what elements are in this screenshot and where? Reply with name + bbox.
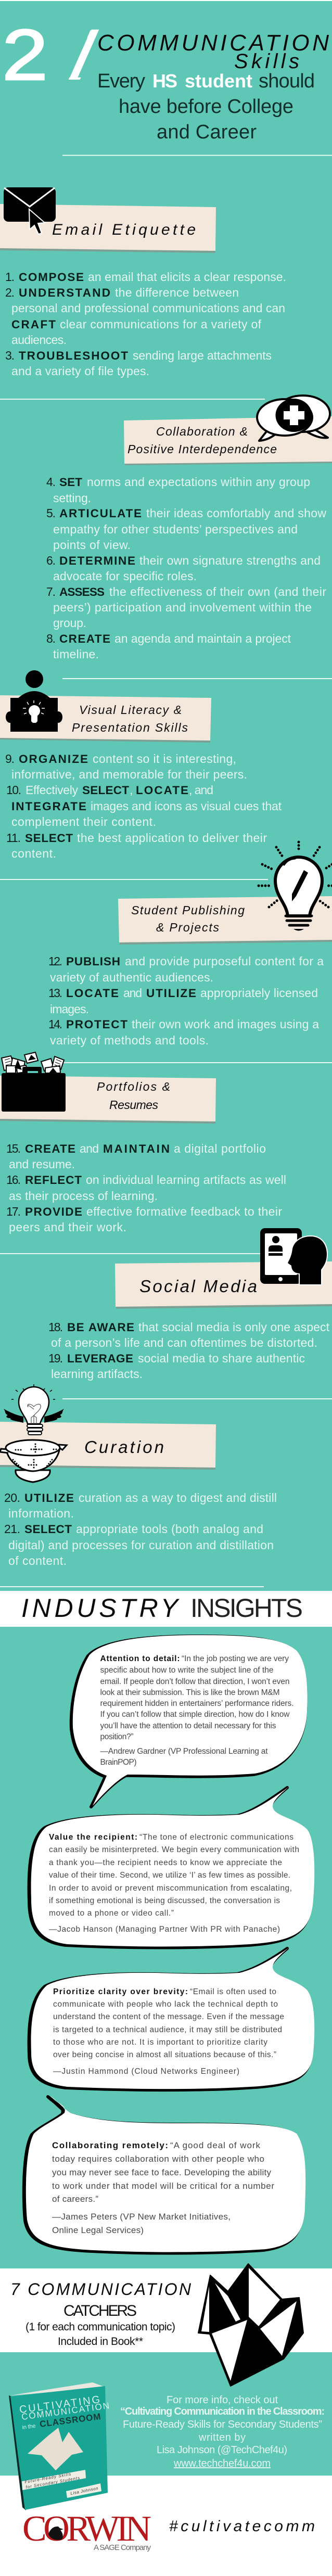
speech bubble: collaborating remotely: today requires collaboration with other people who — [52, 2154, 264, 2164]
title block: HS — [152, 70, 177, 92]
list: skills 4 to 8: 4. — [46, 475, 56, 489]
list: skills 15 to 17: MAINTAIN — [103, 1142, 170, 1155]
list: skills 9 to 11: , — [130, 783, 133, 797]
list: skills 1 to 3: CRAFT — [11, 318, 56, 331]
list: skills 9 to 11: Effectively — [25, 783, 78, 797]
list: skills 1 to 3: and a variety of file types. — [11, 364, 149, 378]
banner: social media — [115, 1261, 332, 1309]
speech bubble: value the recipient: moved to a phone or video call.” — [49, 1909, 174, 1918]
list: skills 4 to 8: points of view. — [53, 538, 131, 552]
list: skills 12 to 14: and provide purposeful content for a — [125, 954, 324, 968]
book cover: COMMUNICATION — [21, 2401, 110, 2422]
book cover: for Secondary Students — [25, 2476, 80, 2490]
heading band: industry insights — [0, 1591, 332, 1627]
banner: email etiquette — [0, 204, 216, 253]
banner: email etiquette: Email Etiquette — [52, 221, 196, 238]
panel: portfolios — [0, 1052, 286, 1234]
banner: portfolios — [0, 1076, 216, 1124]
icon: briefcase with documents — [2, 1052, 66, 1112]
list: skills 12 to 14: PUBLISH — [66, 955, 120, 968]
list: skills 1 to 3 — [5, 270, 286, 378]
banner: student publishing: & Projects — [156, 921, 220, 934]
banner: collaboration: Collaboration & — [156, 425, 248, 438]
panel: visual literacy — [0, 670, 282, 860]
list: skills 4 to 8: group. — [53, 616, 86, 630]
list: skills 9 to 11: 10. — [6, 783, 21, 797]
speech bubble: collaborating remotely: Collaborating remotely: — [52, 2140, 168, 2150]
speech bubble: attention to detail: requirement hidden in entertainers’ performance riders. — [100, 1699, 293, 1708]
list: skills 12 to 14: their own work and images using a — [132, 1017, 319, 1031]
speech bubble: attention to detail: look at their submission. This is like the brown M&M — [100, 1688, 280, 1697]
list: skills 15 to 17: peers and their work. — [9, 1220, 126, 1234]
list: skills 1 to 3: 2. — [5, 286, 15, 299]
list: skills 20 and 21: of content. — [8, 1554, 67, 1567]
icon: overlapping speech bubbles with plus — [257, 396, 330, 441]
panel: footer teal text — [120, 2394, 325, 2469]
list: skills 18 and 19: of a person’s life and can oftentimes be distorted. — [51, 1336, 317, 1349]
book cover: in the — [22, 2423, 36, 2431]
book cover: CLASSROOM — [39, 2412, 101, 2429]
list: skills 20 and 21: 21. — [4, 1522, 20, 1536]
list: skills 9 to 11: complement their content. — [11, 815, 156, 828]
list: skills 9 to 11: 11. — [6, 831, 21, 845]
list: skills 4 to 8: their own signature strengths and — [139, 554, 321, 567]
title block: Skills — [234, 50, 299, 73]
banner: student publishing — [118, 896, 332, 945]
list: skills 9 to 11: , and — [189, 783, 213, 797]
banner: collaboration: Positive Interdependence — [127, 442, 277, 456]
list: skills 20 and 21: curation as a way to digest and distill — [79, 1491, 277, 1504]
list: skills 4 to 8: 6. — [46, 554, 56, 567]
title block: 1 — [41, 14, 122, 100]
banner: visual literacy: Visual Literacy & — [79, 703, 182, 717]
icon: envelope with cursor — [4, 187, 56, 234]
list: skills 15 to 17: CREATE — [25, 1142, 75, 1155]
list: skills 20 and 21: SELECT — [24, 1523, 72, 1536]
panel: footer teal text: www.techchef4u.com — [173, 2458, 271, 2469]
list: skills 9 to 11: content. — [11, 847, 56, 860]
list: skills 15 to 17: PROVIDE — [25, 1205, 82, 1218]
list: skills 9 to 11: SELECT — [25, 832, 73, 845]
panel: collaboration — [46, 396, 332, 661]
list: skills 15 to 17: on individual learning artifacts as well — [86, 1173, 286, 1187]
title block: and Career — [157, 121, 257, 143]
title block: 2 — [2, 15, 48, 95]
title block — [5, 29, 329, 138]
list: skills 1 to 3: clear communications for a variety of — [60, 317, 262, 331]
speech bubble: attention to detail: email. If people don’t follow that direction, I won’t even — [100, 1677, 289, 1686]
list: skills 1 to 3: audiences. — [11, 333, 67, 347]
title block: student — [185, 70, 252, 92]
list: skills 4 to 8: ASSESS — [59, 585, 105, 598]
speech bubble: collaborating remotely: Online Legal Services) — [52, 2225, 144, 2235]
band: communication catchers: Included in Book** — [58, 2336, 143, 2348]
list: skills 9 to 11: 9. — [5, 752, 15, 766]
banner: collaboration — [124, 416, 332, 465]
speech bubble: collaborating remotely: to work under that model will be critical for a number — [52, 2181, 274, 2191]
banner: visual literacy: Presentation Skills — [72, 721, 188, 734]
list: skills 4 to 8: 8. — [46, 632, 56, 645]
banner: curation — [0, 1422, 216, 1470]
speech bubble: value the recipient: Value the recipient: — [49, 1833, 137, 1842]
panel: social media — [48, 1228, 332, 1381]
list: skills 1 to 3: sending large attachments — [133, 349, 272, 362]
list: skills 15 to 17: 17. — [6, 1205, 21, 1218]
panel: footer teal text: written by — [198, 2432, 246, 2443]
speech bubble: attention to detail: position?” — [100, 1732, 133, 1741]
list: skills 1 to 3: 1. — [5, 270, 15, 284]
list: skills 9 to 11 — [5, 752, 282, 860]
banner: visual literacy — [0, 695, 211, 743]
list: skills 4 to 8: ARTICULATE — [59, 507, 142, 520]
speech bubble: collaborating remotely: you may never see face to face. Developing the ability — [52, 2167, 272, 2177]
speech bubble: collaborating remotely: “A good deal of work — [170, 2140, 260, 2150]
list: skills 18 and 19 — [48, 1320, 330, 1381]
speech bubble: attention to detail: Attention to detail: — [100, 1654, 180, 1663]
list: skills 4 to 8: DETERMINE — [59, 554, 135, 567]
list: skills 12 to 14: images. — [50, 1002, 89, 1016]
list: skills 1 to 3: UNDERSTAND — [19, 286, 110, 299]
list: skills 12 to 14 — [48, 954, 324, 1047]
list: skills 15 to 17: as their process of learning. — [9, 1189, 158, 1203]
book cover: Lisa Johnson — [70, 2486, 99, 2496]
title block: COMMUNICATION — [97, 30, 329, 56]
list: skills 4 to 8: an agenda and maintain a project — [114, 632, 291, 645]
list: skills 12 to 14: UTILIZE — [146, 987, 196, 1000]
speech bubble: prioritize clarity: “Email is often used to — [190, 1987, 276, 1996]
list: skills 9 to 11: LOCATE — [136, 784, 188, 797]
list: skills 18 and 19: social media to share authentic — [138, 1351, 305, 1365]
banner: portfolios: Portfolios & — [97, 1080, 170, 1093]
list: skills 9 to 11: the best application to deliver their — [77, 831, 267, 845]
list: skills 12 to 14: LOCATE — [66, 987, 119, 1000]
book cover: Future-Ready Skills — [24, 2471, 71, 2484]
speech bubble: value the recipient: In order to avoid or prevent miscommunication from escalating, — [49, 1884, 292, 1893]
heading band: industry insights: INSIGHTS — [190, 1593, 303, 1623]
list: skills 18 and 19: learning artifacts. — [51, 1367, 143, 1381]
panel: curation — [0, 1384, 277, 1567]
icon: presenter holding lightbulb board — [6, 670, 62, 732]
list: skills 4 to 8: norms and expectations within any group — [87, 475, 310, 489]
list: skills 4 to 8: 7. — [46, 585, 56, 598]
list: skills 18 and 19: LEVERAGE — [67, 1352, 133, 1365]
list: skills 1 to 3: personal and professional communications and can — [11, 301, 285, 315]
speech bubble: value the recipient: can easily be misinterpreted. We begin every communication with — [49, 1845, 299, 1854]
speech bubble: collaborating remotely: —James Peters (VP New Market Initiatives, — [52, 2212, 231, 2222]
book cover — [9, 2382, 110, 2510]
speech bubble: value the recipient: —Jacob Hanson (Managing Partner With PR with Panache) — [49, 1925, 280, 1934]
speech bubble: prioritize clarity: to those who are not. It is important to prioritize clarity — [53, 2038, 267, 2047]
title block: have before College — [119, 96, 293, 118]
list: skills 15 to 17: effective formative feedback to their — [86, 1205, 282, 1218]
list: skills 9 to 11: images and icons as visual cues that — [91, 799, 282, 813]
list: skills 9 to 11: content so it is interesting, — [93, 752, 236, 766]
list: skills 4 to 8: 5. — [46, 506, 56, 520]
title block: should — [259, 70, 315, 92]
list: skills 18 and 19: 18. — [48, 1320, 63, 1334]
speech bubble: attention to detail: you’ll have the attention to detail necessary for this — [100, 1721, 276, 1730]
panel: footer teal text: “Cultivating Communication in the Classroom: — [120, 2406, 325, 2417]
speech bubble: attention to detail: BrainPOP) — [100, 1758, 136, 1767]
list: skills 12 to 14: 14. — [48, 1017, 62, 1031]
list: skills 1 to 3: 3. — [5, 349, 15, 362]
banner: portfolios: Resumes — [109, 1098, 158, 1112]
list: skills 20 and 21 — [4, 1491, 277, 1567]
list: skills 20 and 21: UTILIZE — [24, 1491, 74, 1504]
speech bubble: prioritize clarity: communicate with people who lack the technical depth to — [53, 2000, 278, 2009]
list: skills 15 to 17: 16. — [6, 1173, 21, 1187]
panel: student publishing — [48, 842, 332, 1047]
speech bubble: value the recipient: “The tone of electronic communications — [139, 1833, 293, 1842]
list: skills 15 to 17 — [6, 1142, 286, 1234]
list: skills 15 to 17: a digital portfolio — [174, 1142, 266, 1155]
speech bubble: attention to detail: If you can’t follow that simple direction, how do I know — [100, 1710, 290, 1719]
list: skills 12 to 14: PROTECT — [66, 1018, 127, 1031]
panel: footer teal text: Lisa Johnson (@TechChef4u) — [157, 2444, 287, 2456]
speech bubble: attention to detail: —Andrew Gardner (VP Professional Learning at — [100, 1747, 268, 1756]
speech bubble: prioritize clarity: —Justin Hammond (Cloud Networks Engineer) — [53, 2067, 239, 2076]
panel: email etiquette — [0, 187, 286, 378]
list: skills 15 to 17: and resume. — [9, 1157, 75, 1171]
list: skills 18 and 19: 19. — [48, 1351, 63, 1365]
speech bubble: attention to detail: “In the job posting we are very — [182, 1654, 289, 1663]
list: skills 15 to 17: REFLECT — [25, 1174, 82, 1187]
list: skills 1 to 3: COMPOSE — [19, 271, 84, 284]
speech bubble: attention to detail: specific about how to write the subject line of the — [100, 1666, 274, 1675]
list: skills 4 to 8: peers’) participation and involvement within the — [53, 601, 312, 614]
band: communication catchers: CATCHERS — [63, 2302, 137, 2319]
speech bubble: value the recipient: a thank you—the recipient needs to know we appreciate the — [49, 1858, 282, 1867]
speech bubble: prioritize clarity: understand the content of the message. Even if the message — [53, 2012, 284, 2021]
speech bubble: value the recipient: value of their time. Second, we utilize ‘I’ as few times as possible. — [49, 1871, 290, 1880]
list: skills 12 to 14: variety of authentic audiences. — [50, 971, 213, 984]
list: skills 12 to 14: 13. — [48, 986, 62, 1000]
banner: social media: Social Media — [139, 1277, 257, 1296]
band: communication catchers — [0, 2268, 332, 2352]
heading band: industry insights: INDUSTRY — [21, 1593, 180, 1623]
list: skills 4 to 8: CREATE — [59, 632, 110, 645]
speech bubble: value the recipient: if something emotional is being discussed, the conversation is — [49, 1896, 280, 1905]
list: skills 1 to 3: the difference between — [115, 286, 239, 299]
list: skills 15 to 17: 15. — [6, 1142, 21, 1155]
icon: tablet and head silhouette — [260, 1228, 327, 1284]
band: communication catchers: 7 COMMUNICATION — [10, 2280, 191, 2299]
hashtag: #cultivatecomm — [169, 2518, 315, 2535]
list: skills 15 to 17: and — [80, 1142, 99, 1155]
banner: curation: Curation — [84, 1437, 164, 1457]
list: skills 20 and 21: information. — [8, 1507, 74, 1520]
speech bubble: prioritize clarity: Prioritize clarity over brevity: — [53, 1987, 188, 1996]
list: skills 4 to 8: SET — [59, 476, 82, 489]
list: skills 20 and 21: 20. — [4, 1491, 20, 1504]
list: skills 18 and 19: that social media is only one aspect — [138, 1320, 330, 1334]
list: skills 12 to 14: 12. — [48, 954, 62, 968]
speech bubble: attention to detail — [71, 1635, 308, 1807]
list: skills 9 to 11: ORGANIZE — [19, 753, 88, 766]
speech bubble: collaborating remotely — [24, 2096, 305, 2253]
list: skills 20 and 21: digital) and processes for curation and distillation — [8, 1538, 274, 1552]
icon: lightbulb with pencil — [259, 842, 332, 930]
list: skills 12 to 14: appropriately licensed — [200, 986, 318, 1000]
list: skills 4 to 8: empathy for other students’ perspectives and — [53, 522, 298, 536]
icon: paper fortune teller — [198, 2264, 303, 2386]
list: skills 4 to 8: the effectiveness of their own (and their — [109, 585, 326, 598]
icon: winged lightbulb and colander — [0, 1384, 67, 1482]
panel: footer teal text: Future-Ready Skills for Secondary Students” — [123, 2419, 322, 2430]
list: skills 9 to 11: INTEGRATE — [11, 800, 86, 813]
speech bubble: value the recipient — [29, 1787, 314, 1947]
list: skills 4 to 8: setting. — [53, 491, 91, 505]
speech bubble: collaborating remotely: of careers.” — [52, 2194, 98, 2204]
list: skills 4 to 8 — [46, 475, 326, 661]
list: skills 1 to 3: TROUBLESHOOT — [19, 349, 128, 362]
list: skills 1 to 3: an email that elicits a clear response. — [88, 270, 286, 284]
list: skills 20 and 21: appropriate tools (both analog and — [76, 1522, 263, 1536]
list: skills 9 to 11: SELECT — [82, 784, 129, 797]
title block: Every — [97, 70, 145, 92]
logo: corwin: A SAGE Company — [94, 2543, 151, 2552]
list: skills 4 to 8: their ideas comfortably and show — [146, 506, 326, 520]
speech bubble: prioritize clarity: is targeted to a technical audience, it may still be distributed — [53, 2025, 282, 2034]
panel: footer teal text: For more info, check out — [167, 2394, 278, 2406]
list: skills 12 to 14: and — [123, 986, 142, 1000]
list: skills 4 to 8: timeline. — [53, 647, 99, 661]
list: skills 9 to 11: informative, and memorable for their peers. — [11, 768, 247, 781]
list: skills 18 and 19: BE AWARE — [67, 1321, 134, 1334]
speech bubble: prioritize clarity: over being concise in almost all situations because of this.” — [53, 2050, 276, 2059]
logo: corwin: CORWIN — [22, 2509, 151, 2549]
book cover: CULTIVATING — [19, 2394, 100, 2416]
white footer band — [0, 2476, 332, 2576]
banner: student publishing: Student Publishing — [131, 903, 245, 917]
band: communication catchers: (1 for each communication topic) — [25, 2321, 175, 2333]
list: skills 12 to 14: variety of methods and tools. — [50, 1034, 209, 1047]
list: skills 4 to 8: advocate for specific roles. — [53, 569, 197, 583]
speech bubble: prioritize clarity — [29, 1947, 314, 2090]
